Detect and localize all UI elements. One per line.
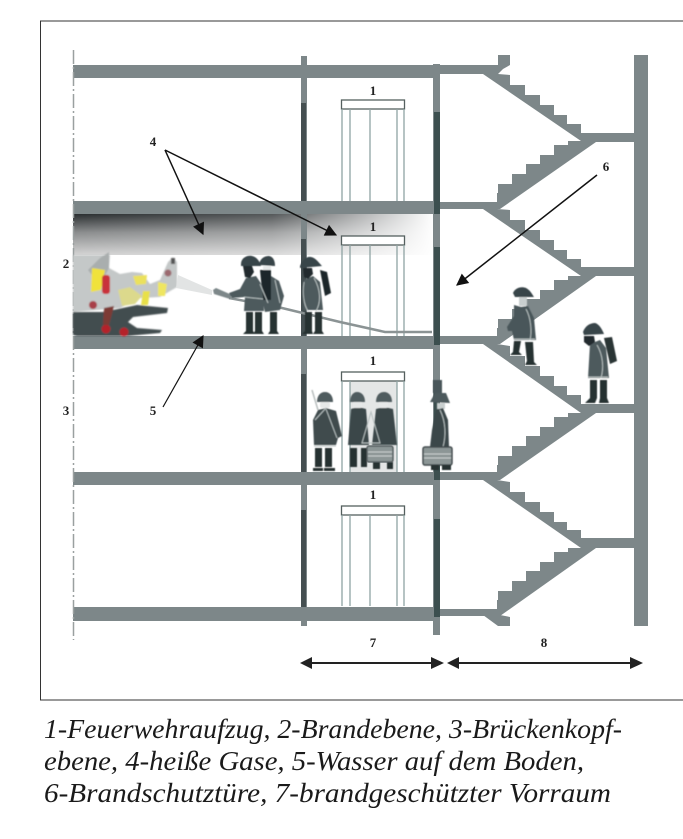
fire doors: dark wall sections bbox=[301, 103, 440, 617]
firefighter left bbox=[348, 407, 369, 445]
number labels: 2 bbox=[63, 256, 69, 271]
dimension arrow 7 bbox=[300, 657, 444, 669]
arrows 4: hot gases bbox=[165, 150, 336, 235]
firefighter right bbox=[372, 407, 397, 445]
water jet bbox=[176, 275, 212, 295]
dimension arrow 8 bbox=[447, 657, 643, 669]
number labels: 1 bbox=[370, 219, 376, 234]
number labels: 7 bbox=[370, 635, 377, 650]
firefighter by the wall, in vestibule bbox=[312, 390, 342, 471]
elevator 3 (bridgehead floor) bbox=[342, 372, 404, 472]
number labels: 1 bbox=[370, 487, 376, 502]
firefighter 1 bbox=[229, 256, 264, 334]
caption: 1-Feuerwehraufzug, 2-Brandebene, 3-Brückenkopf- bbox=[44, 714, 622, 744]
number labels: 1 bbox=[370, 353, 376, 368]
elevator 1 (top floor) bbox=[342, 100, 404, 201]
diagram frame bbox=[40, 21, 683, 700]
firefighter on landing with backpack bbox=[583, 323, 617, 403]
equipment case in elevator bbox=[367, 446, 393, 462]
arrow 6: fire door bbox=[457, 175, 597, 285]
arrow 5: water on floor bbox=[163, 336, 203, 407]
smoke: hot gases layer bbox=[73, 214, 435, 255]
firefighter 2 bbox=[259, 256, 284, 334]
firefighter carrying case bbox=[423, 380, 452, 470]
stairs: landings and flights bbox=[483, 74, 634, 616]
elevator 4 (bottom floor) bbox=[342, 506, 404, 606]
number labels: 3 bbox=[63, 403, 70, 418]
caption: ebene, 4-heiße Gase, 5-Wasser auf dem Boden, bbox=[44, 746, 584, 776]
fire: burning wreck bbox=[73, 252, 177, 336]
caption bbox=[44, 714, 622, 808]
number labels bbox=[63, 83, 610, 650]
elevator 2 (fire floor) bbox=[342, 236, 404, 336]
nozzle bbox=[213, 288, 232, 299]
number labels: 1 bbox=[370, 83, 376, 98]
number labels: 4 bbox=[150, 134, 157, 149]
firefighter team with nozzle bbox=[213, 256, 331, 334]
dashed bridgehead line bbox=[72, 50, 74, 640]
firefighter 3 bbox=[300, 257, 324, 334]
number labels: 6 bbox=[603, 159, 610, 174]
firefighter 3 (behind wall) backpack bbox=[320, 270, 331, 296]
hose bbox=[229, 298, 432, 332]
caption: 6-Brandschutztüre, 7-brandgeschützter Vorraum bbox=[44, 778, 611, 808]
firefighters in elevator with case bbox=[348, 392, 397, 469]
building section: floors and walls bbox=[73, 55, 648, 635]
number labels: 8 bbox=[541, 635, 548, 650]
stair level 1 bbox=[483, 74, 634, 209]
stair level 2 bbox=[483, 209, 634, 344]
number labels: 5 bbox=[150, 403, 157, 418]
stair level 4 bbox=[483, 480, 634, 616]
stair level 3 bbox=[483, 344, 634, 480]
firefighter on stairs, descending bbox=[507, 287, 537, 365]
